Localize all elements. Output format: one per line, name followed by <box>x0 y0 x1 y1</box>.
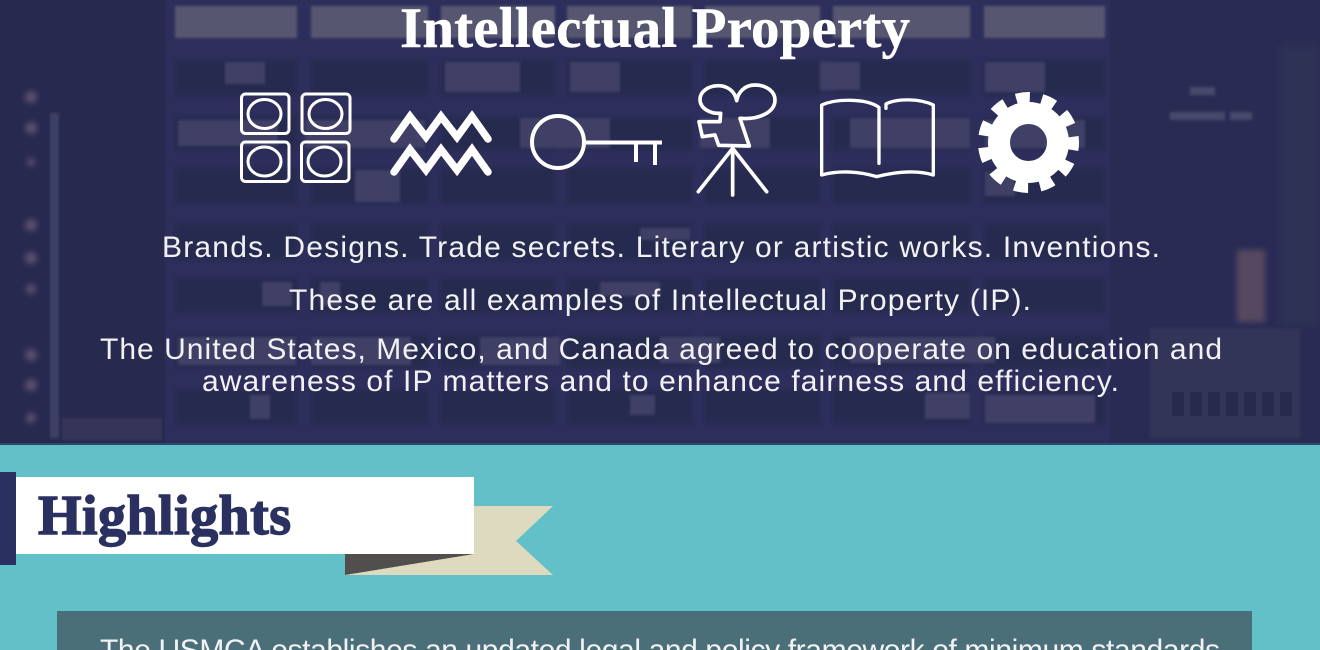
text block: intellectual property description: awareness of IP matters and to enhance fairness and efficiency. <box>202 365 1119 398</box>
heading: highlights: Highlights <box>38 485 291 547</box>
panel: intellectual property hero <box>0 0 1320 445</box>
background: night building photo <box>0 0 1320 445</box>
ribbon banner <box>0 472 553 575</box>
text block: intellectual property description <box>100 231 1222 398</box>
panel: highlights section <box>0 445 1320 650</box>
text block: intellectual property description: The United States, Mexico, and Canada agreed to cooperate on education and <box>100 333 1222 366</box>
icon: wave lines <box>394 116 488 172</box>
icon: film camera on tripod <box>698 85 775 195</box>
icon: open book <box>822 100 933 177</box>
callout: USMCA summary <box>57 611 1252 650</box>
icon: trademark squares <box>242 94 350 182</box>
text block: intellectual property description: Brands. Designs. Trade secrets. Literary or artistic works. Inventions. <box>162 231 1160 264</box>
icon: gear <box>984 98 1073 187</box>
text block: intellectual property description: These are all examples of Intellectual Property (IP). <box>289 284 1031 317</box>
icon: key <box>532 116 662 168</box>
